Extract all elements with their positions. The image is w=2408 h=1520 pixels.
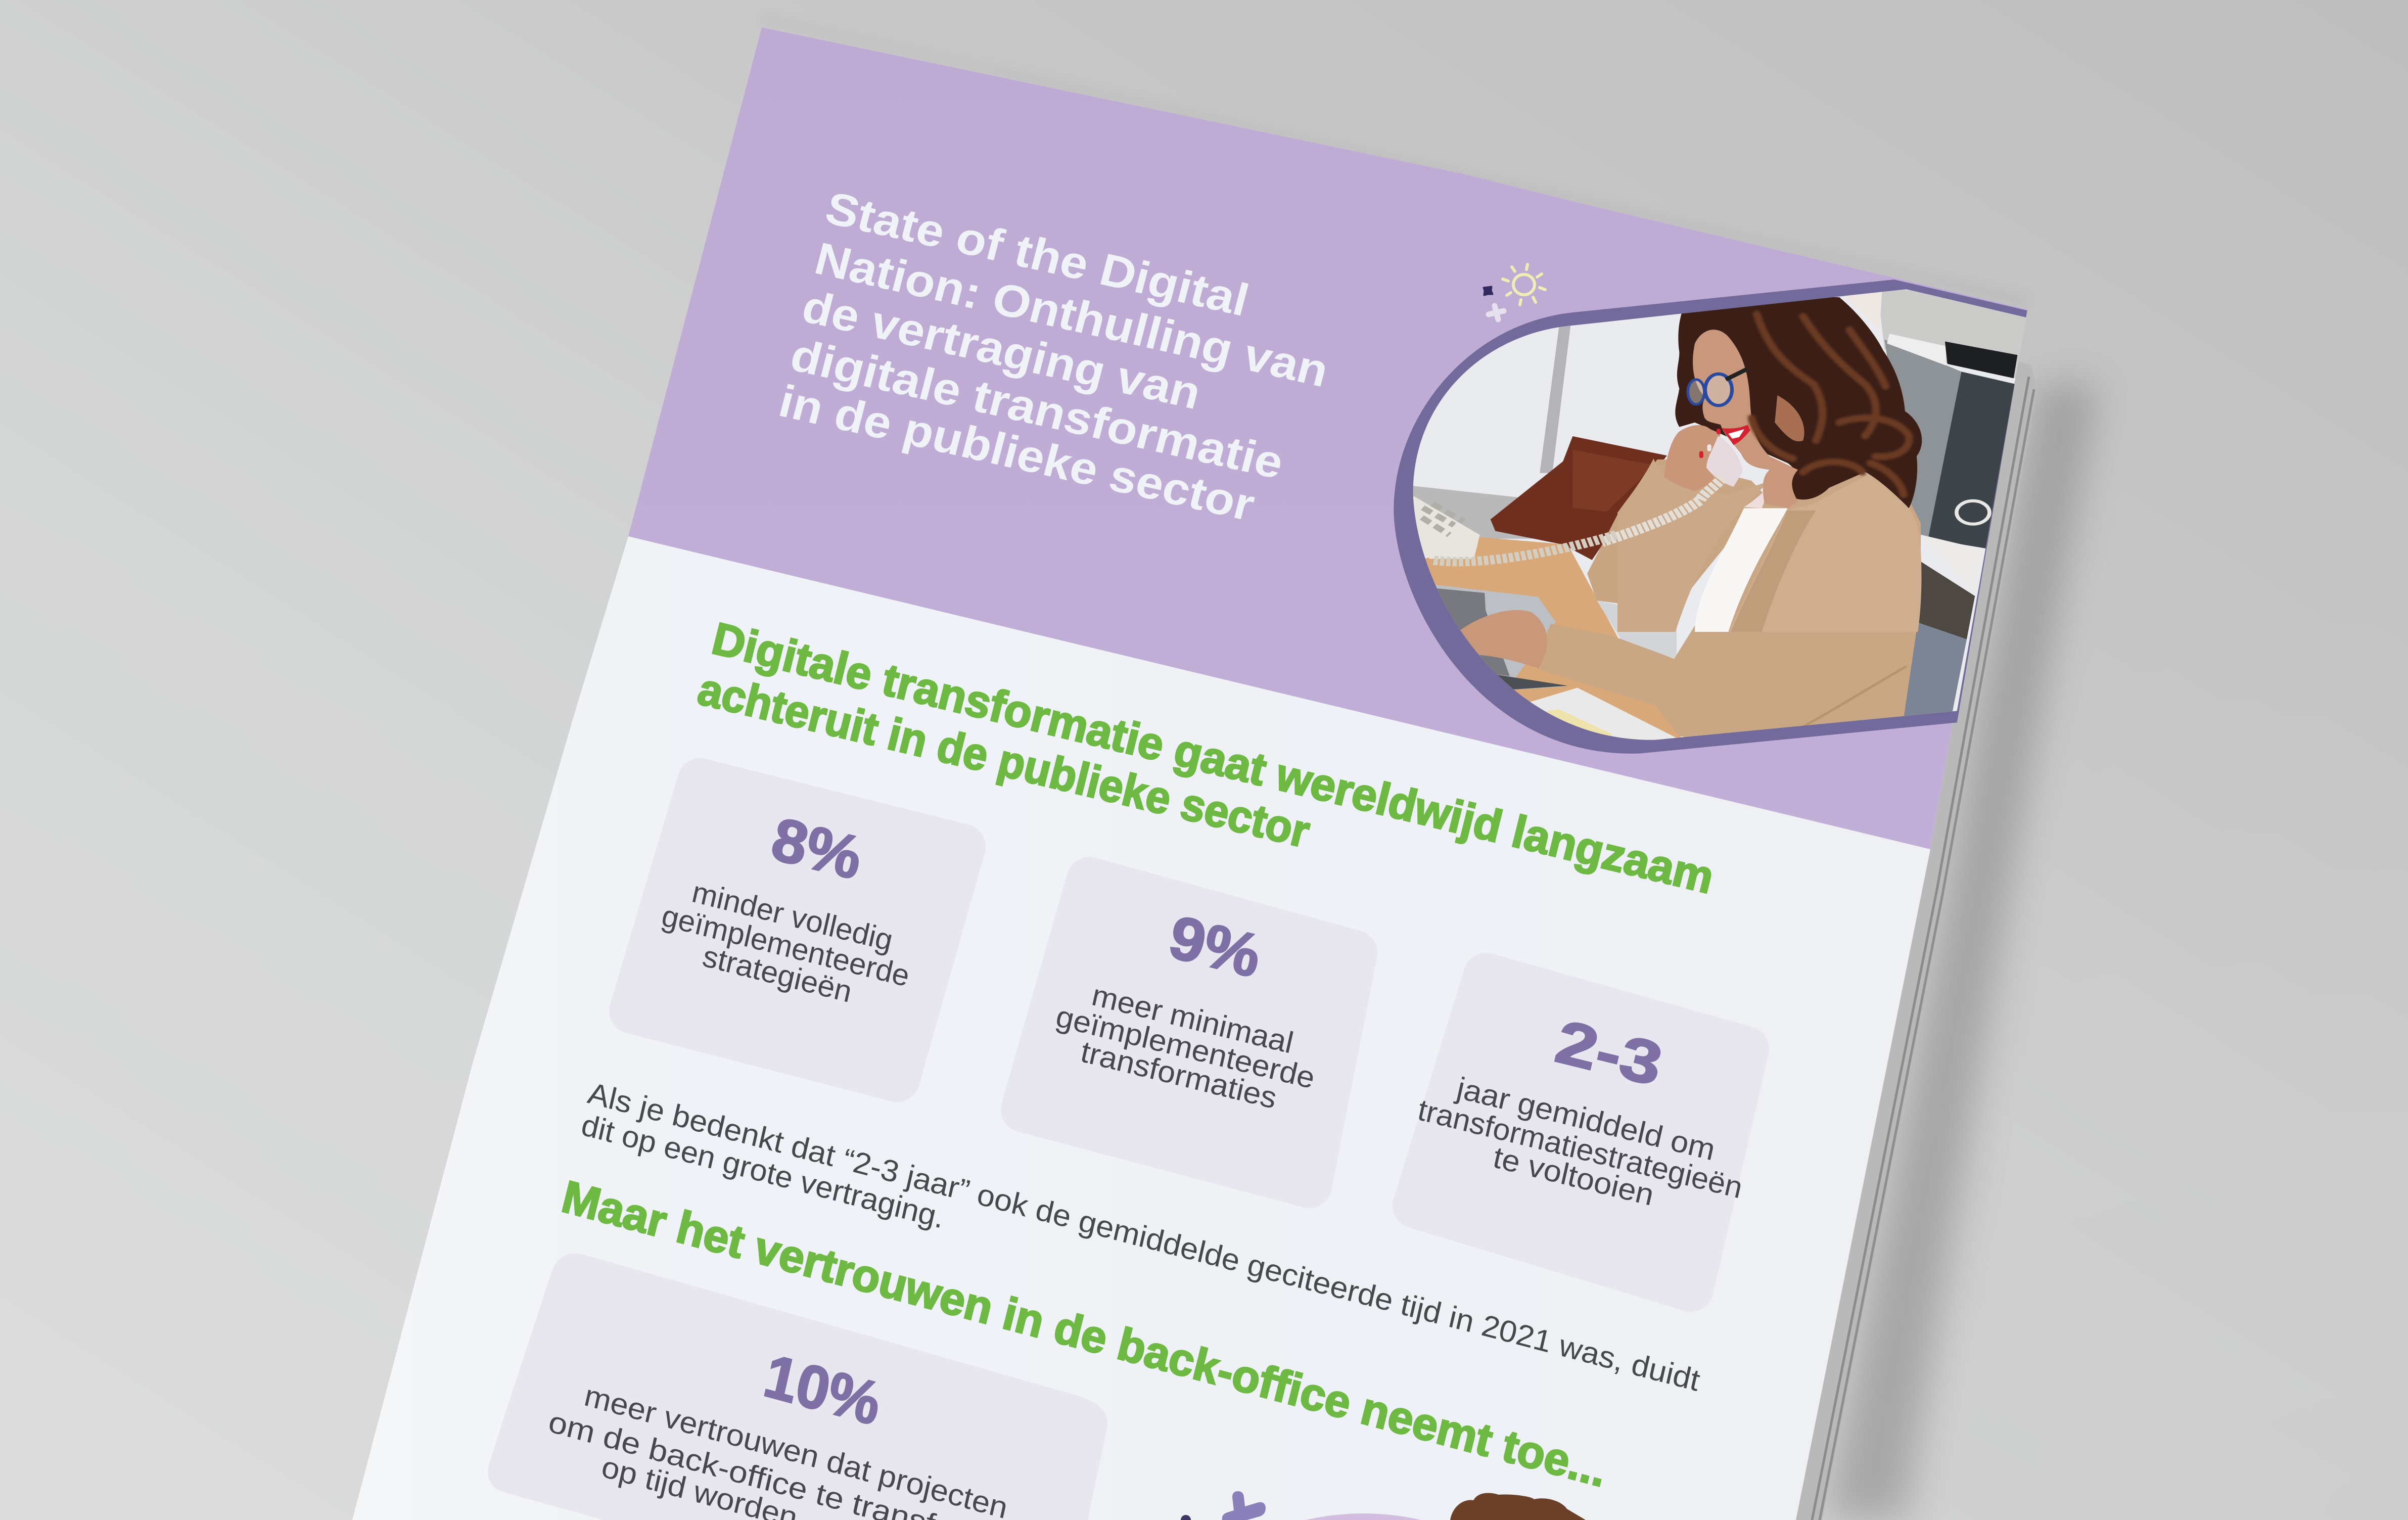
panel: stat 2-3: 2-3 bbox=[1550, 1007, 1669, 1099]
right side shelving bbox=[1879, 290, 2026, 378]
panel: stat 8%: strategieën bbox=[700, 939, 855, 1009]
panel: stat 10%: meer vertrouwen dat projecten bbox=[581, 1378, 1011, 1520]
panel: stat 2-3: transformatiestrategieën bbox=[1415, 1092, 1746, 1205]
title: Nation: Onthulling van bbox=[810, 234, 1333, 397]
panel: stat 9%: transformaties bbox=[1078, 1034, 1280, 1115]
panel: stat 8% bbox=[632, 781, 963, 1079]
heading: digital transformation: Digitale transformatie gaat wereldwijd langzaam bbox=[707, 613, 1719, 903]
icon: sun with sparkles bbox=[1484, 264, 1545, 319]
title: in de publieke sector bbox=[774, 376, 1260, 531]
paragraph: dit op een grote vertraging. bbox=[578, 1108, 948, 1235]
panel: stat 2-3: jaar gemiddeld om bbox=[1453, 1071, 1719, 1167]
heading: back-office confidence: Maar het vertrouwen in de back-office neemt toe... bbox=[557, 1171, 1612, 1497]
panel: stat 9% bbox=[1024, 880, 1355, 1185]
panel: stat 8%: geïmplementeerde bbox=[659, 898, 913, 993]
heading: digital transformation: achteruit in de publieke sector bbox=[693, 664, 1315, 858]
jacket bbox=[1537, 471, 1921, 742]
title bbox=[774, 183, 1333, 531]
panel: stat 9%: 9% bbox=[1163, 903, 1267, 990]
coiled phone cord bbox=[1432, 535, 1616, 562]
stack of pages edge bbox=[1796, 360, 2037, 1520]
page body bbox=[352, 27, 2027, 1520]
hand on laptop bbox=[1452, 610, 1547, 668]
panel: stat 9%: geïmplementeerde bbox=[1053, 999, 1318, 1095]
header photo: woman on the telephone at a desk bbox=[1394, 272, 2042, 759]
title: de vertraging van bbox=[797, 282, 1206, 419]
header band bbox=[628, 27, 2027, 849]
brochure drop shadow bbox=[762, 15, 2098, 1520]
panel: stat 2-3: te voltooien bbox=[1490, 1140, 1657, 1212]
paragraph: Als je bedenkt dat “2-3 jaar” ook de gemiddelde geciteerde tijd in 2021 was, duidt bbox=[585, 1076, 1703, 1398]
title: digitale transformatie bbox=[785, 330, 1288, 489]
decorative dark dot bbox=[1181, 1515, 1191, 1520]
panel: stat 2-3 bbox=[1415, 976, 1746, 1289]
panel: stat 10%: 10% bbox=[758, 1342, 887, 1438]
title: State of the Digital bbox=[820, 183, 1254, 326]
panel: stat 8%: 8% bbox=[766, 805, 868, 893]
panel: stat 9%: meer minimaal bbox=[1089, 978, 1296, 1060]
panel: stat 10% bbox=[488, 1254, 1107, 1520]
head, shoulders and handset, traced bbox=[1602, 297, 1922, 632]
lilac circle behind portrait bbox=[1305, 1513, 1421, 1520]
portrait hair at bottom bbox=[1450, 1493, 1586, 1520]
panel: stat 8%: minder volledig bbox=[689, 874, 896, 957]
icon: purple plus bbox=[1222, 1491, 1266, 1520]
